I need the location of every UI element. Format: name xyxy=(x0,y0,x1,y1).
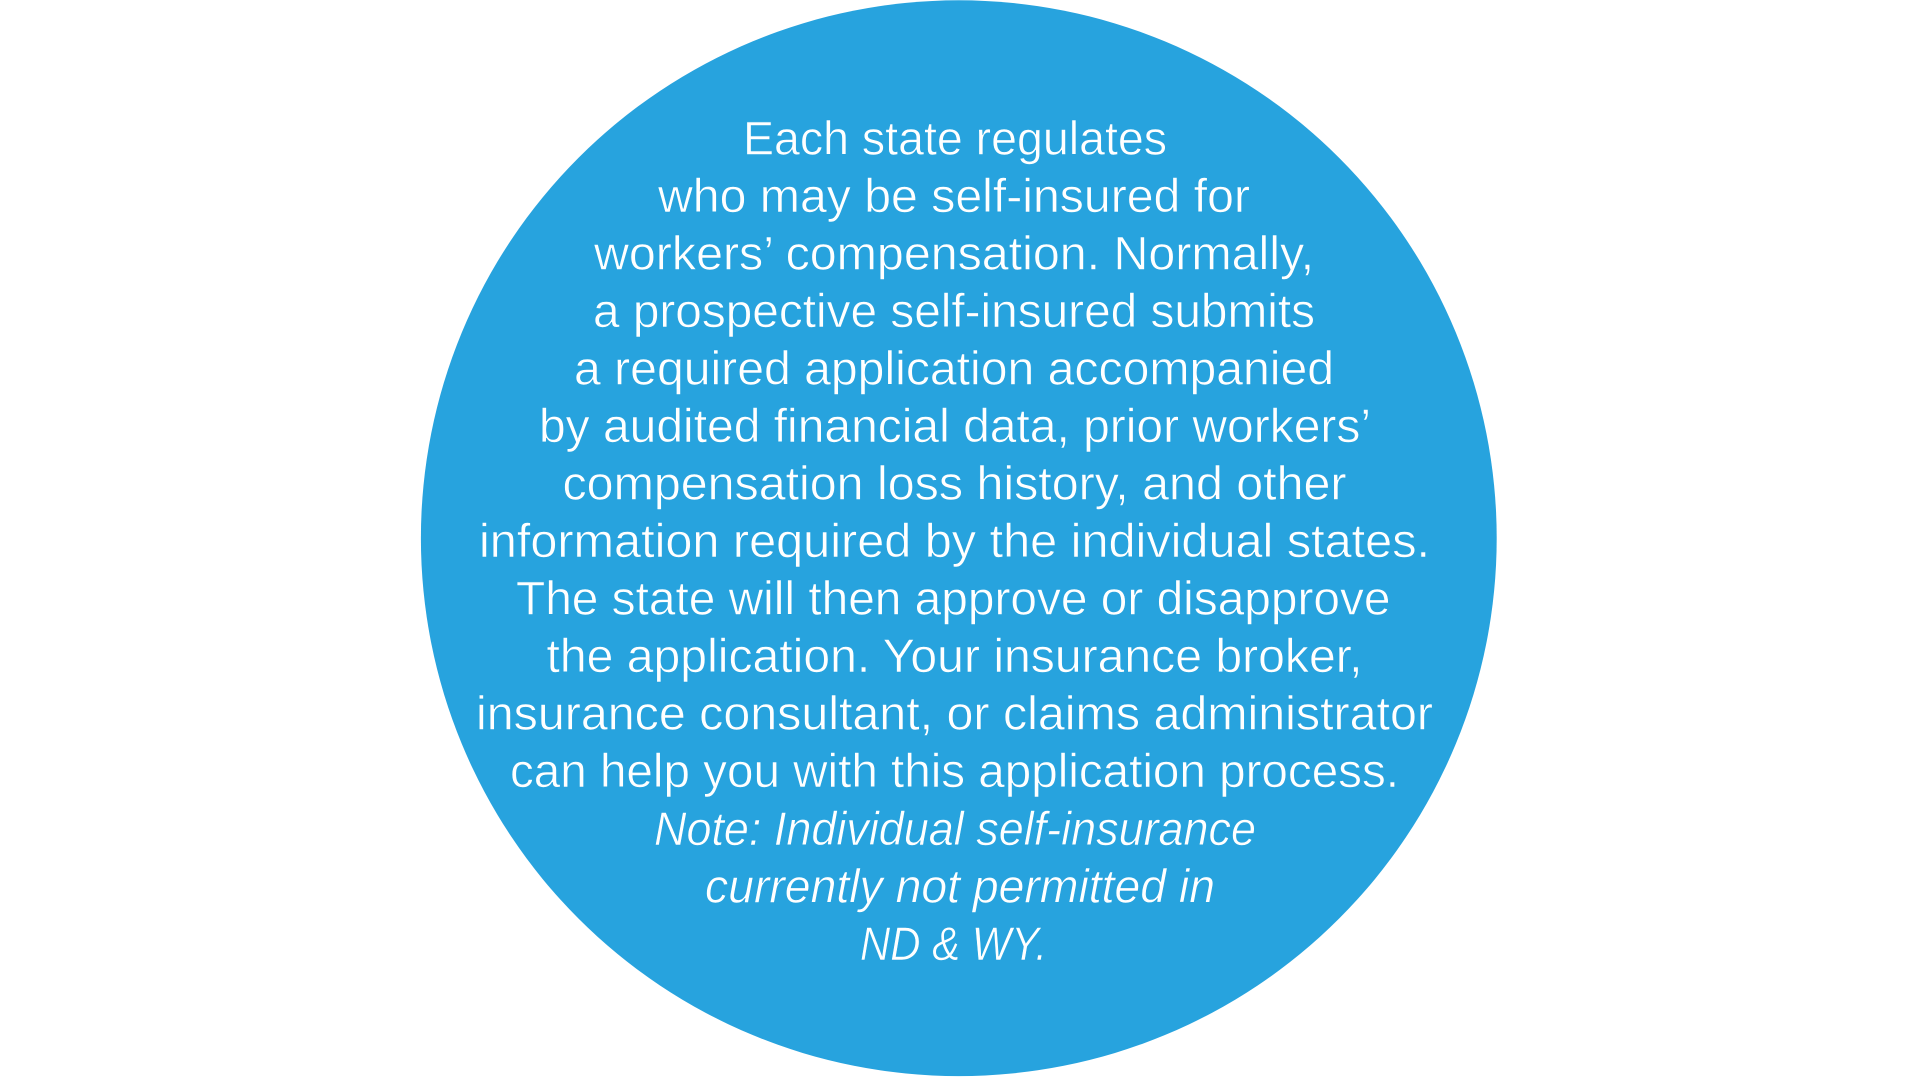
text block: self-insurance explanation: a required application accompanied xyxy=(574,342,1334,394)
text block: self-insurance explanation: who may be self-insured for xyxy=(657,169,1250,222)
text block: italic note: Note: Individual self-insurance xyxy=(654,802,1256,855)
panel: blue circle xyxy=(421,0,1497,1076)
text block: self-insurance explanation: by audited financial data, prior workers’ xyxy=(539,399,1371,452)
text block: self-insurance explanation: information required by the individual states. xyxy=(479,514,1430,567)
text block: self-insurance explanation: the application. Your insurance broker, xyxy=(546,629,1362,682)
text block: self-insurance explanation: workers’ compensation. Normally, xyxy=(593,226,1314,280)
text block: self-insurance explanation: a prospective self-insured submits xyxy=(593,284,1315,337)
text block: self-insurance explanation: can help you with this application process. xyxy=(510,744,1399,797)
text block: italic note: ND & WY. xyxy=(860,917,1047,970)
text block: self-insurance explanation: insurance consultant, or claims administrator xyxy=(476,686,1433,740)
text block: italic note xyxy=(654,802,1256,970)
text block: italic note: currently not permitted in xyxy=(705,860,1215,912)
text block: self-insurance explanation: compensation loss history, and other xyxy=(562,456,1346,510)
text block: self-insurance explanation xyxy=(476,112,1433,797)
text block: self-insurance explanation: The state will then approve or disapprove xyxy=(516,572,1390,624)
text block: self-insurance explanation: Each state regulates xyxy=(743,112,1167,164)
